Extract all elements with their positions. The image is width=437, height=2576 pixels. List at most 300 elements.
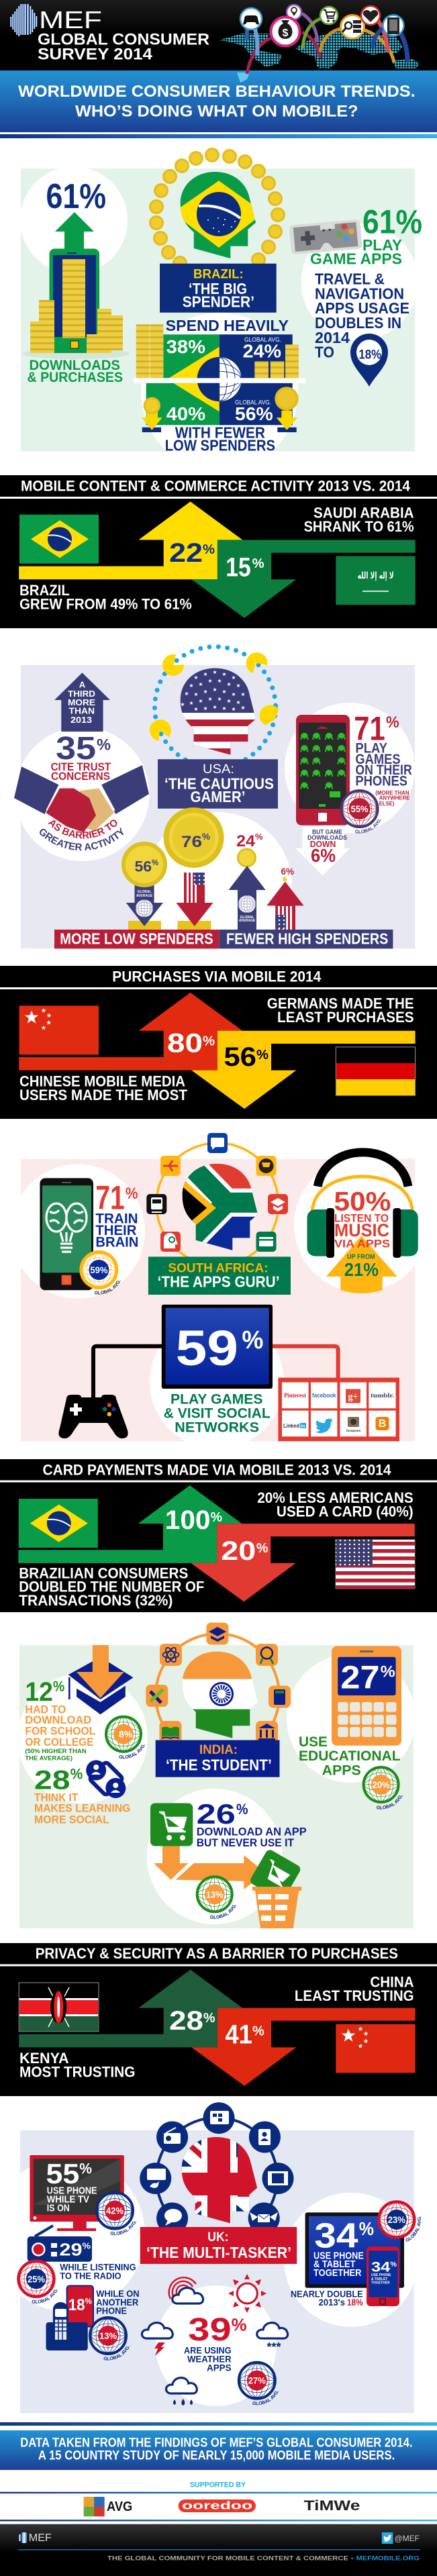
ring of study icons <box>156 1634 279 1757</box>
text: had to download: HAD TO <box>25 1703 66 1716</box>
title box: Brazil: BRAZIL: <box>193 267 244 281</box>
icon: film <box>262 2163 294 2194</box>
TV: 55%: 55 <box>46 2158 79 2189</box>
stat: 39% weather apps: ARE USING <box>184 2344 232 2355</box>
stat: 41%: 41 <box>226 2020 252 2049</box>
stat: 71% train their brain: 71 <box>95 1179 125 1216</box>
text: travel and navigation: 2014 <box>315 329 350 346</box>
radio: 29% <box>28 2226 92 2262</box>
note: more than anywhere else: ANYWHERE <box>379 795 410 801</box>
coin: 76%: 76 <box>181 833 202 851</box>
stat: 35%: 35 <box>56 731 96 766</box>
stat: 41%: % <box>252 2024 264 2039</box>
badge: 25% global average <box>17 2259 58 2303</box>
phone with coins <box>50 248 99 353</box>
head: Brazil flag <box>180 172 256 258</box>
stat: 28%: 28 <box>34 1765 70 1795</box>
icon: winged mail <box>248 2203 280 2234</box>
badge: 27% global average: 27% <box>248 2375 266 2386</box>
heading: spend heavily: SPEND HEAVILY <box>166 317 289 334</box>
footer logo: MEF <box>29 2532 52 2544</box>
label: downloads and purchases: DOWNLOADS <box>30 358 120 373</box>
supported by label: SUPPORTED BY <box>190 2481 246 2489</box>
text: Americans: 20% LESS AMERICANS <box>257 1489 414 1506</box>
monitor: 59%: 59 <box>176 1320 238 1376</box>
text: Brazilian consumers: DOUBLED THE NUMBER OF <box>19 1579 204 1595</box>
pac-man icons <box>146 650 281 744</box>
title box: USA <box>158 759 278 809</box>
text: makes learning more social: THINK IT <box>34 1791 79 1804</box>
flag: Germany <box>336 1047 416 1095</box>
stat: 80%: % <box>203 1034 215 1048</box>
icon: graduation cap <box>206 1623 228 1644</box>
TV: 55%: % <box>79 2161 92 2177</box>
stat: 100%: % <box>211 1510 222 1525</box>
arrow: game downloads down: BUT GAME <box>312 829 342 836</box>
arrow: a third more than 2013: MORE <box>68 697 95 707</box>
icon: chat with bird <box>140 2163 171 2194</box>
icon: plane <box>160 1156 181 1176</box>
icon: sun <box>228 2274 266 2313</box>
label: with fewer low spenders: WITH FEWER <box>175 424 265 442</box>
text: Brazilian consumers <box>19 1565 204 1609</box>
text: nearly double 2013: NEARLY DOUBLE <box>291 2289 363 2299</box>
stat: 35%: % <box>97 736 111 754</box>
phone: 34%: & TABLET <box>371 2277 387 2281</box>
badge: 13% global average: GLOBAL AVG. <box>103 2346 130 2361</box>
chart: spenders flag block: GLOBAL AVG. <box>235 399 271 405</box>
map tip over the banner <box>237 72 250 83</box>
label: use educational apps: EDUCATIONAL <box>299 1748 401 1764</box>
arrow: Brazil up <box>18 1485 242 1563</box>
arrow: up global high spenders: AVERAGE <box>239 919 256 923</box>
stat: 50% listen to music: LISTEN TO <box>334 1212 389 1225</box>
logo: ooredoo: ooredoo <box>182 2499 252 2512</box>
text: had to download: (50% HIGHER THAN <box>25 1748 87 1755</box>
arrow: Kenya up <box>19 1969 242 2047</box>
head: South Africa flag <box>183 1164 258 1250</box>
flag: Brazil <box>19 1499 98 1548</box>
section heading: MOBILE CONTENT & COMMERCE ACTIVITY 2013 VS. 2014 <box>21 477 411 494</box>
badge: 23% global average <box>377 2200 422 2242</box>
phone: 34% <box>367 2246 399 2306</box>
data source banner: A 15 COUNTRY STUDY OF NEARLY 15,000 MOBILE MEDIA USERS. <box>38 2449 395 2463</box>
badge: 20% global average: 20% <box>373 1779 390 1790</box>
icon: map pin 18% <box>350 334 388 387</box>
badge: 23% global average: 23% <box>388 2214 405 2225</box>
icon: landline with red mobile: % <box>85 2297 92 2306</box>
icon: cart square <box>150 1803 193 1846</box>
badge: 8% global average: GLOBAL AVG. <box>119 1744 145 1758</box>
text: Germans <box>267 995 414 1026</box>
stat: 15%: % <box>252 556 264 571</box>
chart: spenders flag block <box>134 334 305 425</box>
stat: 24% with coin: 24 <box>236 832 256 850</box>
ring of media icons <box>156 2118 277 2238</box>
icon: connected people <box>86 1760 126 1798</box>
stat: 24% with coin <box>236 832 263 866</box>
section: purchases via mobile <box>0 966 437 1119</box>
arrow: game downloads down: DOWNLOADS <box>307 834 347 842</box>
label: use educational apps: USE <box>299 1734 328 1750</box>
stat: 12%: % <box>53 1678 64 1695</box>
tablet: 34% <box>305 2212 404 2288</box>
text: travel and navigation: TRAVEL & <box>315 270 385 287</box>
title box: South Africa <box>148 1256 291 1295</box>
stat: 20% <box>221 1536 269 1566</box>
stat: 71% play games: GAMES <box>355 752 401 767</box>
footer strapline: THE GLOBAL COMMUNITY FOR MOBILE CONTENT & COMMERCE <box>107 2555 348 2561</box>
white circles behind stats <box>20 166 418 452</box>
title box: South Africa: SOUTH AFRICA: <box>168 1261 268 1275</box>
stat: 15%: 15 <box>226 552 251 582</box>
flag: USA <box>336 1540 415 1589</box>
arrow: down global low spenders: AVERAGE <box>136 894 153 898</box>
stat: 61%: 61% <box>46 177 106 216</box>
stat: 71% play games <box>354 709 412 789</box>
text: while listening to the radio: WHILE LISTENING <box>60 2262 136 2273</box>
stat: 26% download an app: 26 <box>197 1798 236 1830</box>
arrow: Brazil up <box>19 501 242 579</box>
falling coins with arrows <box>142 388 297 432</box>
badge: 13% global average: GLOBAL AVG. <box>210 1905 236 1919</box>
arrow: a third more than 2013: THIRD <box>68 689 95 699</box>
icon: rainbow cloud <box>169 2277 203 2303</box>
arrow: up green <box>55 212 94 250</box>
arrow: down USA low spenders <box>176 873 213 926</box>
curved text: as barrier to greater activity <box>40 820 124 851</box>
arrow: down global low spenders <box>126 885 163 926</box>
twitter handle <box>382 2532 420 2544</box>
text: while on another phone <box>96 2288 140 2316</box>
footer <box>0 2524 437 2576</box>
arrow: up from 21% <box>326 1236 397 1293</box>
label: with fewer low spenders <box>165 424 275 454</box>
arrow: a third more than 2013: A <box>79 680 86 690</box>
badge: 27% global average <box>238 2361 279 2406</box>
text: Americans <box>257 1489 414 1520</box>
icon: pencil and ruler <box>146 1685 168 1707</box>
badge: 55% global average: GLOBAL AVG. <box>355 819 381 834</box>
coin: 56%: % <box>152 858 158 867</box>
badge: 27% global average: GLOBAL AVG. <box>252 2391 279 2406</box>
icon: tablet <box>203 2102 235 2134</box>
arrow: China up <box>19 993 242 1071</box>
logo: AVG <box>84 2497 132 2516</box>
arrow: a third more than 2013: 2013 <box>70 715 92 725</box>
text: Germans: GERMANS MADE THE <box>267 995 414 1011</box>
text: travel and navigation: TO <box>315 343 334 360</box>
stat: 22%: 22 <box>169 538 203 568</box>
world map of dots <box>218 30 420 68</box>
curved text: as barrier to greater activity: GREATER ACTIVITY <box>40 827 124 851</box>
stat: 80% <box>167 1029 215 1058</box>
section heading: CARD PAYMENTS MADE VIA MOBILE 2013 VS. 2014 <box>43 1461 391 1478</box>
icon: retro gamepad <box>289 219 362 255</box>
social network grid <box>278 1378 399 1441</box>
icon: award rosette <box>256 1644 278 1666</box>
label: with fewer low spenders: LOW SPENDERS <box>165 437 275 454</box>
text: while listening to the radio: TO THE RADIO <box>60 2271 122 2281</box>
text: nearly double 2013: 18% <box>347 2297 363 2308</box>
logo: AVG: AVG <box>107 2499 132 2514</box>
tablet: 34%: & TABLET <box>313 2259 355 2270</box>
text: Chinese users <box>19 1073 188 1103</box>
badge: 25% global average: 25% <box>28 2273 46 2284</box>
text: makes learning more social: MORE SOCIAL <box>34 1813 109 1826</box>
social network grid: facebook <box>312 1392 336 1399</box>
stat: 28% <box>34 1765 83 1795</box>
stat: 22% <box>169 538 215 568</box>
text: had to download: OR COLLEGE <box>25 1736 94 1748</box>
stat: 39% weather apps: APPS <box>207 2362 232 2373</box>
stat: 61% play game apps: GAME APPS <box>310 250 402 268</box>
stat: 39% weather apps <box>184 2312 247 2373</box>
coin: 56% <box>124 844 165 885</box>
icon: brain gears <box>160 1232 181 1252</box>
footer strapline: MEFMOBILE.ORG <box>356 2555 420 2561</box>
panel: India <box>19 1623 414 1928</box>
label: downloads and purchases <box>27 358 123 385</box>
flag: Kenya <box>19 1983 99 2032</box>
arrows: download to bin <box>154 1846 265 1889</box>
icon: graduation cap with download arrow <box>68 1645 133 1714</box>
text: Brazilian consumers: BRAZILIAN CONSUMERS <box>19 1565 188 1581</box>
icon: atom <box>160 1644 182 1666</box>
arrow: up from 21%: 21% <box>344 1259 379 1280</box>
text: Brazilian consumers: TRANSACTIONS (32%) <box>19 1592 173 1609</box>
phone: 27% educational apps: 27 <box>340 1661 380 1696</box>
title box: India: ‘THE STUDENT’ <box>166 1756 272 1773</box>
stat: 56% <box>224 1042 269 1072</box>
icon: shopping cart <box>256 1156 277 1176</box>
flag: Saudi Arabia: لا إله إلا الله <box>358 571 394 581</box>
stat: 56%: 56 <box>224 1042 256 1072</box>
stat: 28%: 28 <box>169 2006 203 2036</box>
stat: 24% with coin: % <box>255 832 263 842</box>
map connection arcs <box>247 13 407 74</box>
stat: 71% train their brain: % <box>126 1185 138 1203</box>
ring of coins <box>150 149 285 270</box>
icon: graduation cap <box>268 1194 288 1214</box>
section: privacy and security <box>0 1943 437 2096</box>
stat: 61% play game apps: 61% <box>362 203 422 241</box>
title box: UK <box>140 2227 297 2264</box>
banner heading: WHO’S DOING WHAT ON MOBILE? <box>75 102 358 120</box>
chart: spenders flag block: GLOBAL AVG. <box>244 336 281 343</box>
stat: 28% <box>169 2006 215 2036</box>
map icon: cart <box>320 7 338 24</box>
icon: game controller <box>58 1395 128 1438</box>
stat: 71% train their brain: THEIR <box>95 1223 136 1238</box>
icon: train <box>146 1194 166 1214</box>
title: global consumer survey: GLOBAL CONSUMER <box>38 31 209 48</box>
badge: 13% global average: 13% <box>99 2330 117 2341</box>
head: India flag <box>183 1651 258 1738</box>
stat: 61% play game apps: PLAY <box>362 236 402 254</box>
tablet: 34%: USE PHONE <box>313 2250 364 2262</box>
logo wordmark: MEF <box>39 6 102 34</box>
icon: handshake <box>14 765 149 832</box>
stat: 26% download an app: DOWNLOAD AN APP <box>197 1826 307 1838</box>
title box: Brazil <box>160 264 277 313</box>
tablet: 34%: 34 <box>314 2216 358 2255</box>
badge: 59% global average: GLOBAL AVG. <box>94 1281 121 1295</box>
stat: 71% play games: ON THEIR <box>355 762 412 778</box>
coin: 76% <box>166 810 222 865</box>
title: global consumer survey <box>38 31 209 63</box>
section: mobile content and commerce activity <box>0 475 437 628</box>
map icon: heart <box>361 6 380 25</box>
badge: 8% global average: 8% <box>119 1729 133 1740</box>
icon: snow cloud <box>257 2323 288 2354</box>
cable: monitor to gamepad <box>93 1346 162 1398</box>
chart: spenders flag block: 24% <box>243 340 281 361</box>
stat: 61% play game apps <box>310 203 422 268</box>
icon: map pin 18%: 18% <box>358 348 381 362</box>
chart: spenders flag block: 38% <box>166 336 205 357</box>
title banner <box>0 70 437 132</box>
icon: MEF waveform logo <box>10 4 38 36</box>
text: China least trusting: LEAST TRUSTING <box>295 1987 414 2004</box>
data source banner <box>0 2430 437 2470</box>
map icon: tablet <box>383 15 404 36</box>
text: Brazil <box>19 582 192 613</box>
stat: 28%: % <box>203 2011 215 2026</box>
twitter handle: @MEF <box>395 2534 420 2543</box>
ring of app icons <box>156 1143 279 1265</box>
social network grid: g+ <box>348 1392 358 1402</box>
icon: brain bulb <box>46 1203 87 1252</box>
logo: ooredoo <box>179 2499 256 2512</box>
map icon: gamepad <box>240 8 262 30</box>
label: cite trust concerns: CITE TRUST <box>51 760 111 773</box>
TV: 55%: USE PHONE <box>47 2185 97 2196</box>
icon: snow cloud: *** <box>266 2340 281 2354</box>
badge: 59% global average <box>79 1250 121 1295</box>
stat: 26% download an app: BUT NEVER USE IT <box>197 1836 295 1849</box>
social network grid: B <box>379 1418 386 1430</box>
panel: USA <box>14 644 415 949</box>
arrow: up USA 6%: 6% <box>281 866 295 877</box>
phone with space invaders <box>296 715 350 826</box>
text: Kenya most trusting <box>19 2050 135 2081</box>
arrow: game downloads down: DOWN <box>310 839 336 849</box>
arrow: a third more than 2013 <box>54 673 110 732</box>
badge: 23% global average: GLOBAL AVG. <box>405 2216 422 2242</box>
text: Americans: USED A CARD (40%) <box>277 1503 414 1520</box>
stat: 39% weather apps: WEATHER <box>187 2353 232 2364</box>
arrow: up from 21%: UP FROM <box>347 1254 375 1261</box>
icon: headphones <box>307 1152 418 1258</box>
coin stacks on shelf <box>136 324 299 378</box>
badge: 59% global average: 59% <box>90 1265 108 1275</box>
section heading: PURCHASES VIA MOBILE 2014 <box>112 968 322 985</box>
TV: 55%: IS ON <box>47 2202 70 2214</box>
logo: Timwe: TiMWe <box>304 2498 360 2514</box>
banner heading: WORLDWIDE CONSUMER BEHAVIOUR TRENDS. <box>18 83 416 101</box>
icon: landline with red mobile <box>46 2286 93 2350</box>
flag: Saudi Arabia <box>336 556 416 605</box>
text: travel and navigation: DOUBLES IN <box>315 314 401 332</box>
TV: 55%: WHILE TV <box>47 2193 89 2205</box>
white circles behind stats <box>17 1654 416 1924</box>
badge: 20% global average: GLOBAL AVG. <box>377 1795 403 1810</box>
flag: China <box>336 2024 416 2073</box>
stat: 71% train their brain <box>95 1179 138 1250</box>
badge: 55% global average: 55% <box>351 803 369 814</box>
phone: 34%: 34 <box>371 2259 391 2275</box>
label: play games and visit social networks: PLAY GAMES <box>171 1391 263 1407</box>
footer strapline: • <box>351 2555 353 2561</box>
arrow: China down <box>191 2008 416 2086</box>
text: while on another phone: PHONE <box>96 2305 127 2316</box>
panel: UK <box>17 2102 422 2414</box>
arrow: game downloads down <box>295 827 350 875</box>
text: Germans: LEAST PURCHASES <box>277 1009 414 1026</box>
section heading: PRIVACY & SECURITY AS A BARRIER TO PURCHASES <box>36 1945 398 1962</box>
text: makes learning more social: MAKES LEARNING <box>34 1801 130 1815</box>
title box: South Africa: ‘THE APPS GURU’ <box>158 1273 279 1290</box>
title box: Brazil: SPENDER’ <box>183 293 254 310</box>
stat: 71% play games: PHONES <box>355 773 407 789</box>
monitor: 59%: % <box>242 1326 263 1354</box>
text: travel and navigation: APPS USAGE <box>315 299 409 317</box>
stat: 39% weather apps: % <box>232 2315 247 2335</box>
icon: radio <box>156 2121 188 2153</box>
title box: India <box>156 1740 279 1777</box>
social network grid: Instagram <box>346 1430 360 1433</box>
text: China least trusting: CHINA <box>370 1974 414 1991</box>
text: makes learning more social <box>34 1791 130 1826</box>
stat: 71% play games: PLAY <box>355 740 387 756</box>
text: Chinese users: CHINESE MOBILE MEDIA <box>19 1073 185 1090</box>
stat: 26% download an app: % <box>236 1801 248 1818</box>
flag: Brazil <box>19 515 99 564</box>
icon: calculator <box>269 1686 291 1707</box>
text: China least trusting <box>295 1974 414 2004</box>
badge: 42% global average: GLOBAL AVG. <box>110 2221 137 2235</box>
ring of blue dots <box>154 647 275 768</box>
badge: 13% global average: 13% <box>206 1889 224 1899</box>
text: Kenya most trusting: MOST TRUSTING <box>19 2063 135 2081</box>
label bar: low and high spenders <box>54 930 393 948</box>
stat: 80%: 80 <box>167 1029 203 1058</box>
label bar: low and high spenders: FEWER HIGH SPENDERS <box>226 930 388 948</box>
map icon: search and servers <box>341 15 364 39</box>
stat: 50% listen to music <box>334 1187 391 1250</box>
stat: 20%: 20 <box>221 1536 256 1566</box>
icon: credit card <box>256 1232 277 1252</box>
coin: 56%: 56 <box>134 858 152 875</box>
arrow: up USA 6% <box>266 866 304 930</box>
tablet: 34%: % <box>359 2218 374 2239</box>
badge: 13% global average <box>89 2316 130 2361</box>
tablet: 34%: TOGETHER <box>313 2267 362 2279</box>
curved text: as barrier to greater activity: AS BARRIER TO <box>48 820 117 839</box>
monitor: 59% <box>162 1305 273 1389</box>
label: cite trust concerns <box>51 760 111 783</box>
map icon: money bag <box>271 17 299 46</box>
header: logo, title and world map <box>0 0 437 70</box>
coin stacks <box>30 300 123 353</box>
text: had to download <box>25 1703 95 1762</box>
social network grid: tumblr. <box>371 1393 394 1399</box>
text: while on another phone: ANOTHER <box>96 2297 138 2308</box>
text: Kenya most trusting: KENYA <box>19 2050 69 2067</box>
icon: cart thrown in bin <box>249 1848 302 1928</box>
label: play games and visit social networks <box>164 1391 271 1435</box>
